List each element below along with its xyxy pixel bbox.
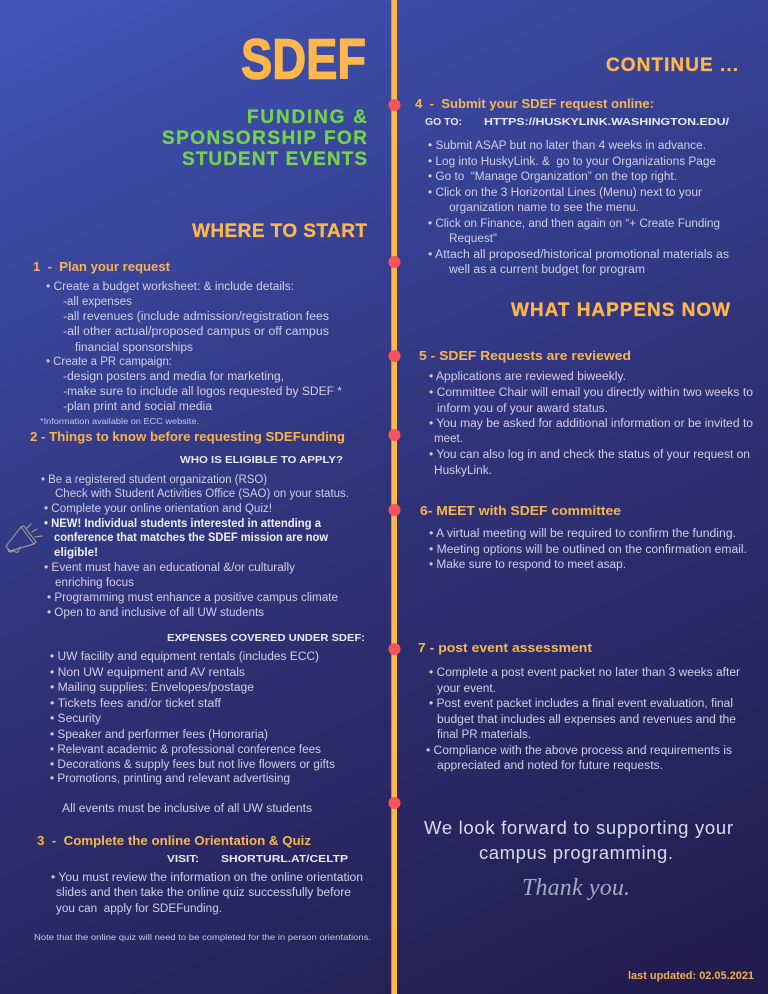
subtitle: SPONSORSHIP FOR [162, 128, 367, 149]
eligibility list: • Be a registered student organization (RSO) [41, 474, 267, 486]
section 5: requests reviewed: 5 - SDEF Requests are reviewed [419, 348, 631, 363]
heading: what happens now: WHAT HAPPENS NOW [511, 300, 730, 321]
section 7: post event assessment: • Post event packet includes a final event evaluation, final [429, 698, 733, 710]
section 1: plan your request: -plan print and social media [63, 401, 213, 413]
section 4: submit online: • Go to “Manage Organization” on the top right. [428, 171, 677, 183]
section 7: post event assessment: budget that includes all expenses and revenues and the [437, 714, 736, 726]
section 3: orientation and quiz: SHORTURL.AT/CELTP [221, 853, 348, 865]
thank you signature: Thank you. [522, 875, 630, 901]
section 1: plan your request: -all revenues (include admission/registration fees [63, 311, 329, 323]
expenses list [50, 651, 335, 785]
eligibility heading: WHO IS ELIGIBLE TO APPLY? [180, 454, 343, 466]
expenses list: • Security [50, 713, 101, 725]
eligibility list: conference that matches the SDEF mission are now [54, 532, 328, 544]
section 6: meet with committee: • Make sure to respond to meet asap. [429, 559, 626, 571]
section 4: submit online: • Submit ASAP but no later than 4 weeks in advance. [428, 140, 706, 152]
section 1: plan your request: • Create a PR campaign: [46, 356, 172, 368]
eligibility list: • Programming must enhance a positive campus climate [47, 592, 338, 604]
section 4: submit online: • Attach all proposed/historical promotional materials as [428, 249, 729, 261]
section 4: submit online: • Click on the 3 Horizontal Lines (Menu) next to your [428, 187, 702, 199]
eligibility list: enriching focus [55, 577, 134, 589]
section 4: submit online: • Click on Finance, and then again on “+ Create Funding [428, 218, 720, 230]
heading: continue: CONTINUE ... [606, 55, 738, 76]
section 3: orientation and quiz: 3 - Complete the online Orientation & Quiz [37, 833, 312, 848]
eligibility list: • Open to and inclusive of all UW students [47, 607, 264, 619]
expenses list: • Promotions, printing and relevant advertising [50, 773, 290, 785]
section 1: plan your request: *Information available on ECC website. [40, 416, 199, 426]
eligibility list: • Complete your online orientation and Quiz! [44, 503, 272, 515]
last updated: last updated: 02.05.2021 [628, 970, 754, 982]
eligibility list: eligible! [54, 547, 98, 559]
section 4: submit online: well as a current budget for program [448, 264, 645, 276]
section 3: orientation and quiz: you can apply for SDEFunding. [56, 903, 222, 915]
section 1: plan your request: 1 - Plan your request [33, 259, 171, 274]
section 7: post event assessment [418, 640, 740, 772]
heading: where to start: WHERE TO START [192, 221, 367, 242]
closing message: campus programming. [479, 842, 673, 863]
section 4: submit online: 4 - Submit your SDEF request online: [415, 96, 654, 111]
section 7: post event assessment: appreciated and noted for future requests. [437, 760, 663, 772]
section 5: requests reviewed: HuskyLink. [434, 465, 492, 477]
section 5: requests reviewed: meet. [434, 433, 463, 445]
expenses list: • Decorations & supply fees but not live flowers or gifts [50, 759, 335, 771]
section 1: plan your request: -all expenses [63, 296, 132, 308]
section 4: submit online: • Log into HuskyLink. & go to your Organizations Page [428, 156, 716, 168]
closing message [424, 817, 733, 863]
expenses list: • Non UW equipment and AV rentals [50, 667, 245, 679]
section 3: orientation and quiz: slides and then take the online quiz successfully before [56, 887, 351, 899]
section 4: submit online [415, 96, 729, 276]
section 4: submit online: organization name to see the menu. [449, 202, 639, 214]
timeline [388, 0, 400, 994]
section 5: requests reviewed: • Applications are reviewed biweekly. [429, 371, 626, 383]
section 1: plan your request: -design posters and media for marketing, [63, 371, 284, 383]
section 1: plan your request: • Create a budget worksheet: & include details: [46, 281, 294, 293]
closing message: We look forward to supporting your [424, 817, 733, 838]
eligibility list: • Event must have an educational &/or culturally [44, 562, 295, 574]
section 7: post event assessment: your event. [437, 683, 496, 695]
expenses list: • Relevant academic & professional conference fees [50, 744, 321, 756]
section 6: meet with committee: • A virtual meeting will be required to confirm the funding. [429, 528, 736, 540]
expenses heading: EXPENSES COVERED UNDER SDEF: [167, 632, 365, 644]
section 7: post event assessment: 7 - post event assessment [418, 640, 593, 655]
section 2: things to know [6, 429, 365, 815]
section 3: orientation and quiz: Note that the online quiz will need to be completed for the in person orientations. [34, 932, 371, 942]
inclusion note: All events must be inclusive of all UW students [62, 803, 312, 815]
section 5: requests reviewed: • You may be asked for additional information or be invited to [429, 418, 753, 430]
subtitle: FUNDING & [247, 107, 367, 128]
section 6: meet with committee [420, 503, 747, 571]
section 6: meet with committee: 6- MEET with SDEF committee [420, 503, 621, 518]
section 7: post event assessment: • Complete a post event packet no later than 3 weeks after [429, 667, 740, 679]
section 4: submit online: HTTPS://HUSKYLINK.WASHINGTON.EDU/ [484, 116, 729, 128]
section 7: post event assessment: final PR materials. [437, 729, 531, 741]
subtitle: STUDENT EVENTS [182, 149, 367, 170]
section 1: plan your request: -make sure to include all logos requested by SDEF * [63, 386, 343, 398]
section 7: post event assessment: • Compliance with the above process and requirements is [426, 745, 732, 757]
section 1: plan your request [33, 259, 343, 426]
section 4: submit online: GO TO: [425, 116, 462, 128]
section 3: orientation and quiz [34, 833, 371, 942]
section 3: orientation and quiz: • You must review the information on the online orientation [51, 872, 363, 884]
section 1: plan your request: -all other actual/proposed campus or off campus [63, 326, 329, 338]
section 5: requests reviewed: • Committee Chair will email you directly within two weeks to [429, 387, 753, 399]
subtitle [162, 107, 367, 170]
section 5: requests reviewed [419, 348, 753, 477]
section 6: meet with committee: • Meeting options will be outlined on the confirmation email. [429, 544, 747, 556]
eligibility list: Check with Student Activities Office (SAO) on your status. [55, 488, 349, 500]
section 3: orientation and quiz: VISIT: [167, 853, 199, 865]
eligibility list [41, 474, 349, 619]
eligibility list: • NEW! Individual students interested in attending a [44, 518, 322, 530]
expenses list: • Tickets fees and/or ticket staff [50, 698, 222, 710]
expenses list: • Speaker and performer fees (Honoraria) [50, 729, 268, 741]
section 4: submit online: Request” [449, 233, 497, 245]
section 2: things to know: 2 - Things to know before requesting SDEFunding [30, 429, 345, 444]
icon: megaphone [6, 524, 42, 552]
expenses list: • UW facility and equipment rentals (includes ECC) [50, 651, 319, 663]
expenses list: • Mailing supplies: Envelopes/postage [50, 682, 254, 694]
title: SDEF [241, 28, 366, 92]
section 1: plan your request: financial sponsorships [75, 342, 193, 354]
section 5: requests reviewed: inform you of your award status. [437, 403, 608, 415]
section 5: requests reviewed: • You can also log in and check the status of your request on [429, 449, 750, 461]
